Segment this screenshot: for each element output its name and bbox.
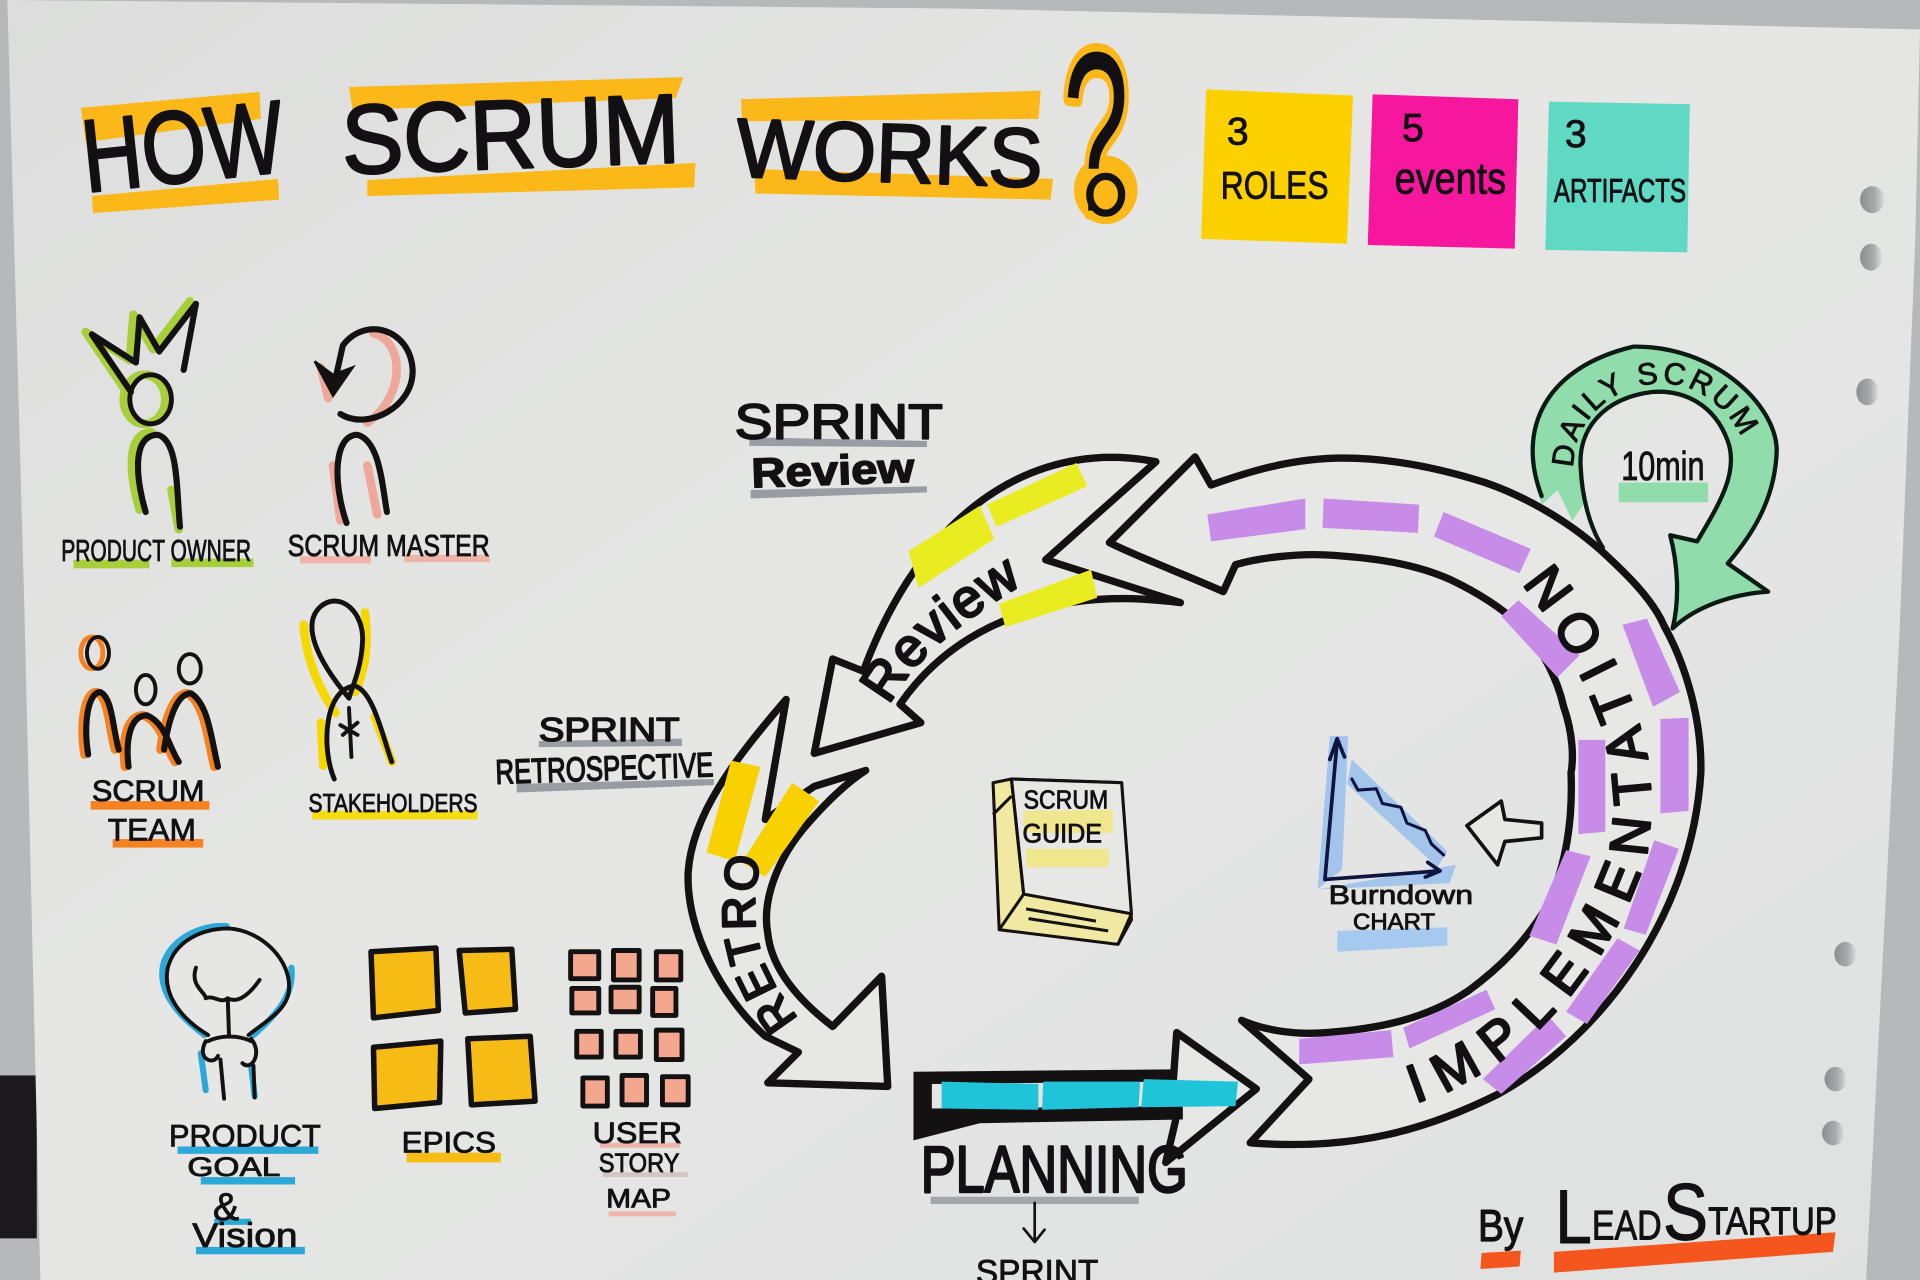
credit: by lead startup: By [1478, 1202, 1523, 1251]
question mark: ? [1063, 6, 1129, 260]
label: product goal and vision: & [213, 1186, 239, 1229]
implementation arrow [1106, 453, 1705, 1148]
title: WORKS [735, 101, 1044, 205]
arrow: to sprint [1024, 1203, 1044, 1242]
review arrow [810, 454, 1184, 757]
daily scrum loop arrow [1530, 344, 1779, 630]
dark band behind sheet [0, 1075, 37, 1238]
planning arrow [913, 1033, 1256, 1280]
icon: light bulb [162, 926, 292, 1099]
label: scrum guide [1022, 786, 1108, 849]
sticky note: 3 artifacts: ARTIFACTS [1554, 173, 1686, 210]
label: product owner: PRODUCT OWNER [61, 534, 251, 568]
arrow: planning bar and head [913, 1033, 1256, 1162]
epics [371, 948, 535, 1162]
binder holes [1822, 186, 1884, 1145]
sticky note: 5 events: events [1395, 155, 1506, 204]
sticky strips: review [909, 463, 1097, 627]
role: scrum master [288, 329, 490, 563]
label: planning: PLANNING [921, 1133, 1188, 1207]
label: burndown chart: CHART [1353, 909, 1435, 935]
label: user story map [593, 1117, 688, 1216]
label: product owner [61, 534, 253, 568]
sticky strips: planning [942, 1079, 1238, 1110]
burndown chart [1318, 736, 1473, 952]
icon: loop-headed person [315, 329, 413, 523]
icon: three people [81, 637, 218, 767]
user story map [571, 951, 688, 1216]
icon: crowned person [86, 301, 196, 529]
label: scrum master: SCRUM MASTER [288, 529, 490, 563]
label: user story map: MAP [606, 1184, 671, 1214]
label: 10 min [1619, 443, 1708, 502]
sticky note: 3 artifacts [1545, 102, 1690, 252]
sticky note: 5 events [1368, 94, 1518, 249]
label: sprint retrospective: RETROSPECTIVE [495, 746, 714, 792]
credit: by lead startup: L [1555, 1175, 1592, 1260]
sticky strips: implementation [1207, 499, 1689, 1094]
icon: four epic cards [371, 948, 535, 1109]
label: user story map: STORY [599, 1148, 680, 1178]
label: scrum team: TEAM [108, 811, 196, 847]
label: sprint review [735, 396, 943, 499]
role: stakeholders [304, 601, 478, 819]
label: burndown chart: Burndown [1329, 880, 1473, 910]
sticky note: 3 roles [1201, 89, 1353, 244]
label: user story map: USER [593, 1117, 682, 1150]
chart: burndown [1318, 736, 1456, 889]
title words: HOW [76, 79, 289, 214]
arrow: implementation outline [1109, 457, 1701, 1145]
label: scrum guide: SCRUM [1024, 786, 1108, 814]
label: product goal and vision: PRODUCT [169, 1117, 321, 1153]
title [76, 6, 1138, 260]
sticky note: 3 roles: ROLES [1221, 164, 1329, 207]
icon: tied person [304, 601, 392, 779]
arrow: review outline [814, 457, 1180, 753]
label: implementation: IMPLEMENTATION [1406, 563, 1652, 1103]
credit: by lead startup: S [1663, 1168, 1708, 1258]
arrow: implementation to chart [1467, 801, 1542, 865]
label: epics: EPICS [402, 1127, 496, 1160]
retro arrow [684, 696, 892, 1090]
label: product goal and vision: Vision [192, 1217, 298, 1255]
label: sprint retrospective: SPRINT [539, 712, 680, 749]
label: scrum team: SCRUM [92, 775, 204, 808]
question mark: ? [1063, 6, 1129, 260]
label: 10 min: 10min [1621, 443, 1704, 489]
label: product goal and vision: GOAL [187, 1152, 280, 1182]
icon: book [993, 779, 1131, 944]
label: product goal and vision [169, 1117, 321, 1255]
title: SCRUM [340, 73, 681, 195]
sticky strips: retro [707, 761, 819, 877]
label: review: Review [858, 558, 1017, 703]
label: burndown chart [1329, 880, 1473, 952]
label: sprint review: SPRINT [735, 396, 943, 450]
credit: by lead startup: TARTUP [1708, 1201, 1837, 1244]
role: product owner [61, 301, 253, 568]
label: stakeholders: STAKEHOLDERS [309, 790, 478, 818]
label: sprint retrospective [495, 712, 714, 792]
sticky note: 3 artifacts: 3 [1565, 113, 1587, 156]
product goal and vision [162, 926, 321, 1255]
sticky note: 5 events: 5 [1402, 107, 1424, 150]
label: scrum team [91, 775, 209, 848]
label: retro: RETRO [722, 856, 798, 1035]
sticky note: 3 roles: 3 [1227, 111, 1249, 154]
arrow: daily scrum [1533, 349, 1777, 628]
label: daily scrum: DAILY SCRUM [1552, 362, 1759, 466]
arrow: retro outline [688, 699, 888, 1086]
icon: story card grid [571, 951, 688, 1106]
label: sprint review: Review [751, 444, 916, 496]
scrum guide book [993, 779, 1131, 944]
role: scrum team [81, 637, 218, 848]
title highlight bands [81, 77, 1053, 213]
credit: by lead startup [1478, 1168, 1837, 1273]
credit: by lead startup: EAD [1592, 1202, 1662, 1249]
label: scrum guide: GUIDE [1022, 819, 1102, 849]
